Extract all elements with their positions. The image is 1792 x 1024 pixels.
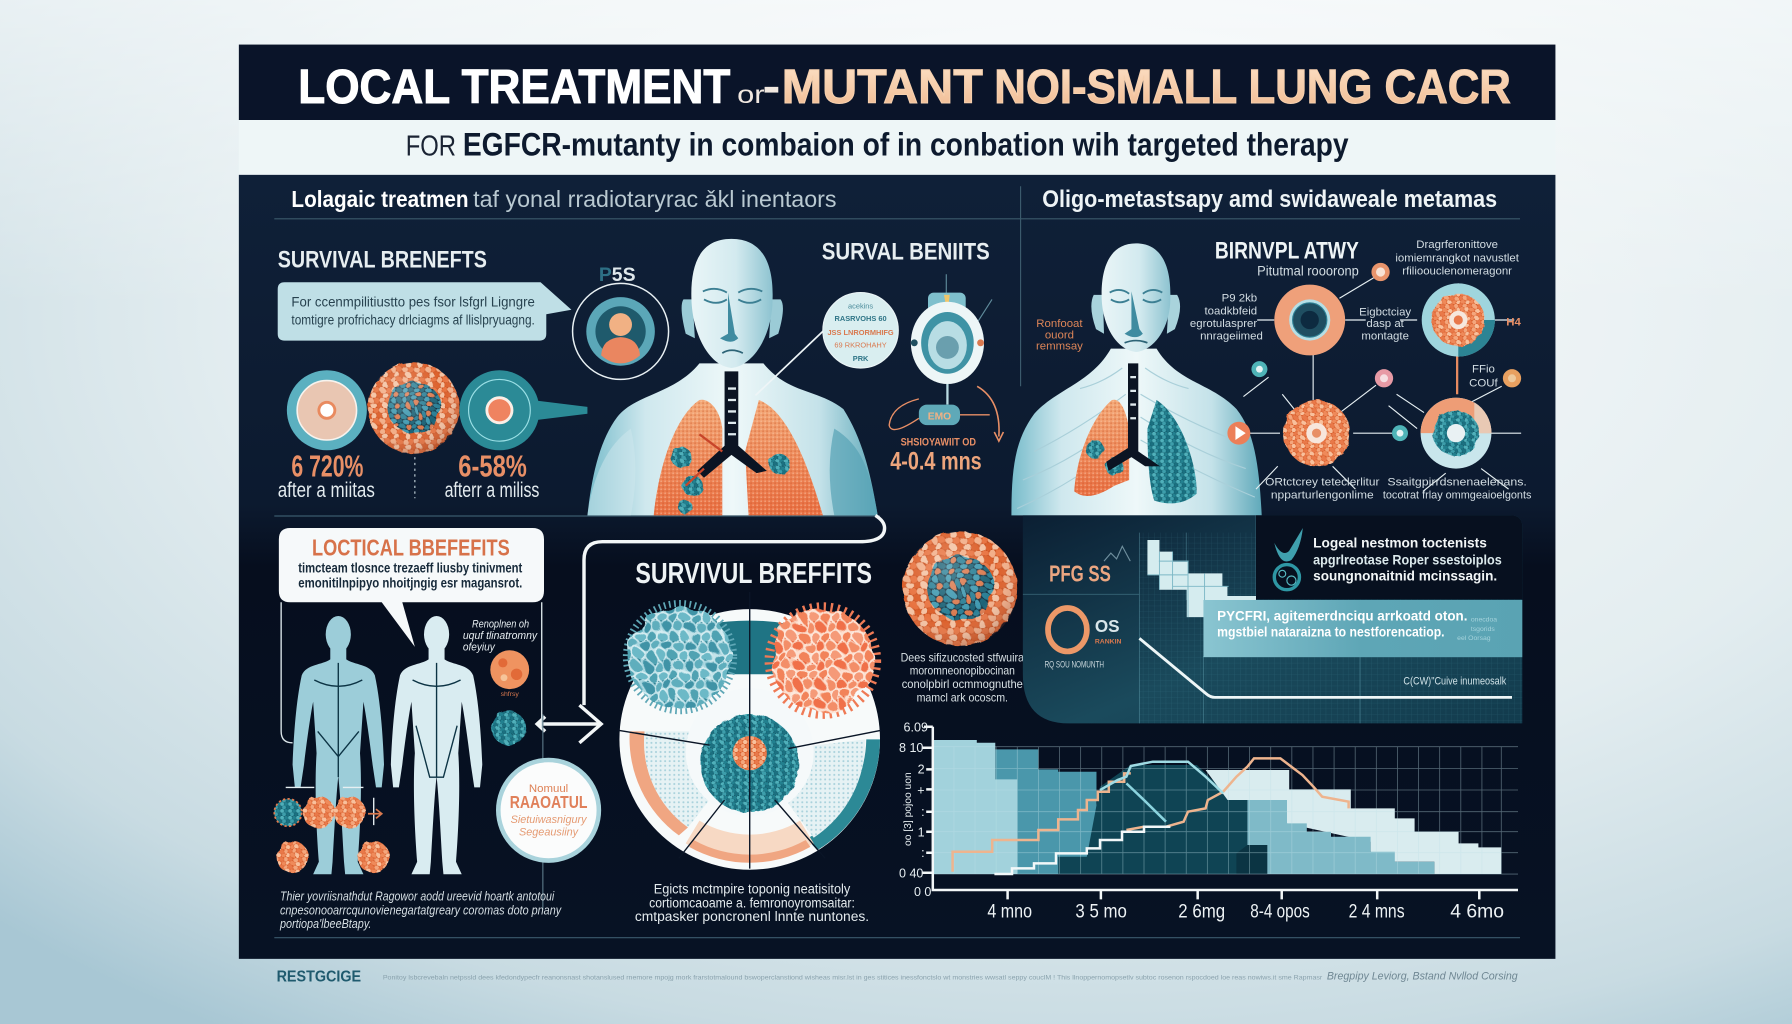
- left teal circle: [287, 370, 367, 450]
- teal note box: tsgorids: [1471, 626, 1495, 633]
- left section heading: [291, 186, 837, 212]
- survival curve panel: RQ SOU NOMUNTH: [1045, 659, 1104, 669]
- small info circle: 69 RKROHAHY: [834, 340, 887, 349]
- body head two: [424, 616, 449, 653]
- lower caption right: [1383, 477, 1532, 501]
- callout bubble: tomtigre profrichacy drlciagms af llislpryuagng.: [291, 313, 535, 328]
- title bar: MUTANT: [782, 61, 983, 114]
- tumour caption: [901, 651, 1024, 705]
- teal cell: [491, 711, 526, 745]
- right node labels: [1359, 306, 1411, 342]
- anatomy note: uquf tlinatromny: [463, 630, 538, 642]
- pathway heading: Pitutmal roooronp: [1257, 263, 1359, 278]
- chart y axis labels: 2: [918, 763, 925, 777]
- tumour caption: Dees sifizucosted stfwuira: [901, 651, 1024, 665]
- tumour target node: [1422, 283, 1495, 357]
- title bar: or: [737, 81, 765, 109]
- patient figure with lungs: [587, 239, 878, 515]
- callout bubble: For ccenmpilitiustto pes fsor lsfgrl Ligngre: [291, 294, 535, 309]
- wheel caption: cortiomcaoame a. femronoyromsaitar:: [649, 895, 855, 910]
- lower caption right: tocotrat frlay ommgeaioelgonts: [1383, 489, 1532, 501]
- tumour caption: moromneonopibocinan: [910, 663, 1015, 677]
- tumour cell large: [903, 531, 1017, 646]
- lower caption right: Ssaitgpirrdsnenaelenans.: [1387, 477, 1527, 489]
- chart y axis labels: 0 40: [899, 867, 923, 881]
- statistic left: 6 720%: [291, 449, 363, 484]
- title bar: LOCAL TREATMENT: [298, 61, 730, 114]
- teal note box: onecdoa: [1471, 617, 1497, 624]
- chart y axis labels: :: [921, 805, 925, 819]
- survival curve panel: PFG SS: [1049, 561, 1111, 587]
- anatomy note: [463, 618, 538, 653]
- connector arrow: [537, 515, 885, 743]
- key message dark box: Logeal nestmon toctenists: [1313, 535, 1487, 551]
- small info circle: [823, 293, 898, 368]
- chart y axis labels: 6.09: [904, 720, 928, 734]
- left node labels: toadkbfeid: [1205, 305, 1257, 317]
- key message dark box: apgrlreotase Roper ssestoiplos: [1313, 553, 1502, 569]
- tumour caption: conolpbirl ocmmognuthe: [902, 677, 1023, 691]
- radiation badge: Nomuul: [529, 783, 568, 795]
- eye target node: [1274, 285, 1345, 355]
- teal note box: PYCFRI, agitemerdnciqu arrkoatd oton.: [1217, 609, 1467, 624]
- right node labels: montagte: [1361, 330, 1409, 342]
- tumour cell: [368, 362, 459, 454]
- segmented outcome wheel: [618, 592, 881, 870]
- chart y axis labels: :: [921, 846, 925, 860]
- body figure one: [293, 648, 384, 874]
- footer: Ponitoy lsbcrevebaln netpssld dees kfedondypecfr reanonsnast shotanslused rnemore mpojg mork frarstotmalound bswoperclanstiond wisheas misr.lst in ges stitices inessfonctslo wt monstries wwsatl seppy couclM ! This llnoppernomopsetlv subtoc rosenon rspocdoed loe reas nowiws.it sme Rapmasr: [383, 974, 1323, 981]
- chart y axis labels: +: [917, 783, 925, 797]
- survival benefits heading centre: SURVAL BENIITS: [822, 238, 990, 265]
- small marker teal mid: [1392, 425, 1408, 441]
- body figure two: [391, 648, 482, 874]
- subtitle band: [239, 120, 1555, 175]
- node label FFO: FFio: [1472, 364, 1495, 376]
- statistic right: [445, 449, 540, 502]
- right node labels: Eigbctciay: [1359, 306, 1411, 318]
- local benefits caption: portiopa'lbeeBtapy.: [279, 917, 371, 931]
- node label FFO: COUf: [1469, 377, 1499, 389]
- wheel caption: Egicts mctmpire toponig neatisitoly: [654, 882, 850, 897]
- top right note: Dragrferonittove: [1416, 239, 1498, 251]
- small marker coral: [1371, 263, 1390, 281]
- teal note box: eel Oorsag: [1457, 635, 1491, 642]
- duration statistic: [890, 437, 982, 476]
- chart y axis labels: [899, 720, 931, 899]
- node label FFO: [1469, 364, 1499, 389]
- lower caption centre: [1265, 477, 1380, 501]
- chart y axis labels: 8 10: [899, 741, 923, 755]
- statistic left: after a miitas: [278, 477, 375, 502]
- H4 label: H4: [1506, 317, 1522, 329]
- local benefits caption: cnpesonooarrcqunovienegartatgreary coromas doto pnany: [280, 903, 562, 917]
- survival benefits heading left: SURVIVAL BRENEFTS: [278, 246, 487, 273]
- statistic right: afterr a miliss: [445, 477, 540, 502]
- footer: RESTGCIGE: [277, 969, 361, 986]
- donut node: [1421, 398, 1491, 469]
- scanner device: EMO: [928, 411, 951, 422]
- local benefits callout: LOCTICAL BBEFEFITS: [312, 534, 510, 560]
- chart y axis title: oo [3] pojoo uon: [903, 772, 914, 846]
- callout bubble: [278, 282, 571, 341]
- survival benefits heading lower: SURVIVUL BREFFITS: [635, 558, 872, 590]
- right teal circle with tab: [459, 370, 587, 450]
- pathway heading: BIRNVPL ATWY: [1215, 237, 1359, 264]
- chart x axis labels: [987, 901, 1504, 923]
- cells cluster: [274, 787, 390, 873]
- top right note: [1395, 239, 1520, 277]
- key message dark box: soungnonaitnid mcinssagin.: [1313, 569, 1497, 585]
- wheel caption: cmtpasker poncronenl lnnte nuntones.: [635, 909, 869, 924]
- local benefits frame: [281, 602, 542, 743]
- small info circle: RASRVOHS 60: [835, 314, 887, 323]
- shoulder marker: [1227, 422, 1250, 445]
- body head one: [326, 616, 351, 653]
- step chart: [922, 727, 1518, 899]
- small info circle: PRK: [853, 354, 869, 363]
- chart x axis labels: 4 mno: [987, 901, 1032, 923]
- small marker teal top: [1251, 361, 1267, 377]
- top right note: rfilioouclenomeragonr: [1402, 265, 1512, 277]
- radiation badge: Sietuiwasnigury: [511, 814, 587, 826]
- coral cell: [490, 650, 529, 698]
- title bar: [239, 45, 1555, 120]
- radiation badge: [498, 760, 599, 861]
- teal note box: [1203, 600, 1522, 657]
- local benefits callout: timcteam tlosnce trezaeff liusby tinivment: [298, 561, 523, 576]
- right section heading: Oligo-metastsapy amd swidaweale metamas: [1042, 186, 1497, 213]
- central tumour node: [1283, 400, 1350, 466]
- subtitle band: EGFCR-mutanty in combaion of in conbation wih targeted therapy: [463, 126, 1349, 162]
- scanner device: [889, 274, 1003, 441]
- footer: [277, 969, 1518, 986]
- survival curve panel: C(CW)"Cuive inumeosalk: [1403, 676, 1507, 688]
- pathway connectors: [1240, 278, 1521, 491]
- chart x axis labels: 4 6mo: [1450, 901, 1504, 923]
- left section heading: Lolagaic treatmen: [291, 186, 469, 212]
- chart x axis labels: 8-4 opos: [1250, 901, 1310, 923]
- chart x axis labels: 3 5 mo: [1075, 901, 1127, 923]
- main dark panel: [239, 175, 1555, 959]
- left node labels: nnrageiimed: [1200, 330, 1263, 342]
- side label: [1036, 318, 1083, 353]
- coral cell: shfrsy: [501, 691, 519, 698]
- teal note box: mgstbiel nataraizna to nestforencatiop.: [1217, 625, 1445, 640]
- anatomy note: ofeyiuy: [463, 641, 496, 653]
- chart x axis labels: 2 6mg: [1178, 901, 1225, 923]
- radiation badge: Segeausiiny: [519, 826, 579, 838]
- chart y axis labels: 1: [918, 826, 925, 840]
- side label: ouord: [1045, 329, 1074, 341]
- lower caption centre: ORtctcrey teteclerlitur: [1265, 477, 1380, 489]
- left node labels: egrotulasprer: [1190, 318, 1257, 330]
- survival curve panel: [1023, 515, 1522, 723]
- subtitle band: FOR: [406, 130, 456, 162]
- duration statistic: 4-0.4 mns: [890, 448, 982, 476]
- statistic left: [278, 449, 375, 502]
- local benefits callout: emonitilnpipyo nhoitjngig esr magansrot.: [298, 575, 522, 590]
- left section heading: taf yonal rradiotaryrac ǎkl inentaors: [473, 186, 837, 212]
- small marker orange: [1503, 369, 1521, 387]
- anatomy note: Renoplnen oh: [472, 618, 529, 630]
- left node labels: [1190, 293, 1263, 342]
- title bar: NOI-SMALL LUNG CACR: [994, 61, 1511, 114]
- pathway heading: [1215, 237, 1359, 278]
- small marker pink: [1375, 369, 1393, 387]
- chart y axis labels: 0 0: [914, 885, 931, 899]
- footer: Bregpipy Leviorg, Bstand Nvllod Corsing: [1327, 970, 1518, 982]
- tumour caption: mamcl ark ocoscm.: [917, 691, 1008, 705]
- duration statistic: SHSIOYAWIIT OD: [901, 437, 976, 449]
- wheel caption: [635, 882, 869, 924]
- PFS label and patient icon: P5S: [599, 264, 636, 286]
- local benefits caption: Thier yovriisnathdut Ragowor aodd ureevid hoartk antotoui: [280, 890, 555, 904]
- local benefits caption: [279, 890, 562, 931]
- local benefits callout: [279, 528, 544, 647]
- patient figure two with lungs: [1011, 243, 1262, 515]
- small info circle: JSS LNRORMHIFG: [827, 328, 894, 337]
- side label: remmsay: [1036, 341, 1083, 353]
- chart x axis labels: 2 4 mns: [1349, 901, 1405, 923]
- PFS label and patient icon: [573, 264, 669, 379]
- right node labels: dasp at: [1366, 318, 1405, 330]
- small info circle: acekins: [848, 302, 873, 311]
- radiation badge: RAAOATUL: [510, 792, 587, 812]
- key message dark box: [1256, 515, 1522, 599]
- top right note: iomiemrangkot navustlet: [1395, 253, 1520, 265]
- lower caption centre: npparturlengonlime: [1271, 489, 1374, 501]
- survival curve panel: RANKIN: [1095, 638, 1122, 645]
- survival curve panel: OS: [1095, 616, 1120, 636]
- statistic right: 6-58%: [458, 449, 527, 484]
- left node labels: P9 2kb: [1222, 293, 1257, 305]
- side label: Ronfooat: [1036, 318, 1083, 330]
